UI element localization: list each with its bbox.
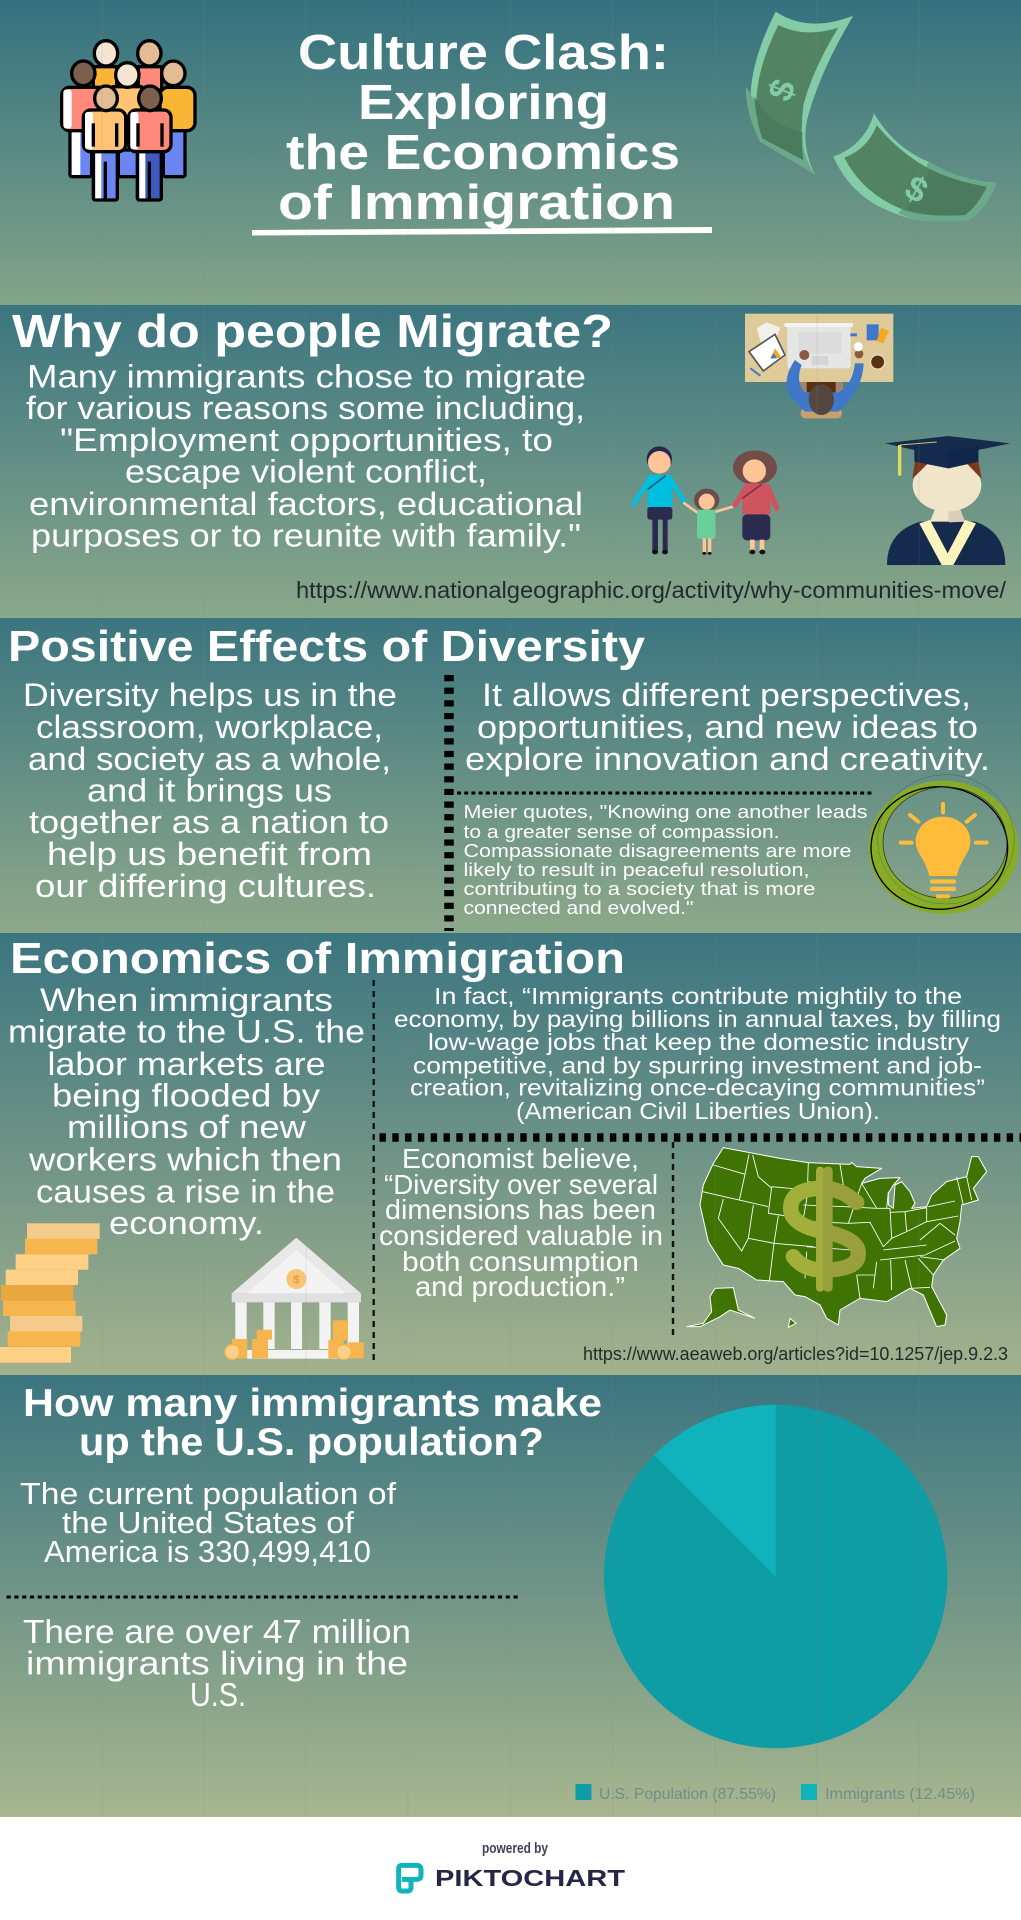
text block: immigrant count xyxy=(23,1614,411,1714)
text block: reasons: escape violent conflict, xyxy=(125,454,487,490)
text block: diversity helps: Diversity helps us in the xyxy=(23,677,397,713)
text block: reasons: Many immigrants chose to migrate xyxy=(27,358,586,394)
chart legend: Immigrants (12.45%) xyxy=(825,1786,975,1803)
heading xyxy=(23,1382,602,1464)
text block: economist quote: “Diversity over several xyxy=(384,1169,658,1200)
text block: economist quote: both consumption xyxy=(402,1246,639,1277)
text block: Meier quote: likely to result in peaceful resolution, xyxy=(464,860,810,880)
footer: powered by Piktochart: PIKTOCHART xyxy=(435,1865,625,1891)
chart legend: U.S. Population (87.55%) xyxy=(599,1786,776,1803)
icon: U.S. map with dollar sign xyxy=(687,1148,987,1327)
text block: current population: the United States of xyxy=(62,1506,355,1540)
text block: labor markets: economy. xyxy=(109,1205,264,1241)
text block: labor markets: causes a rise in the xyxy=(36,1174,335,1210)
title xyxy=(278,26,680,230)
pie chart xyxy=(604,1405,947,1748)
icon: family xyxy=(633,446,777,555)
text block: diversity helps: our differing cultures. xyxy=(35,868,376,904)
text block: diversity helps xyxy=(23,677,397,904)
title: Exploring xyxy=(358,76,609,130)
text block: diversity helps: together as a nation to xyxy=(29,804,389,840)
footer: powered by Piktochart xyxy=(0,1817,1021,1920)
icon: flying dollar bills xyxy=(746,12,997,221)
heading: Economics of Immigration xyxy=(10,934,625,983)
icon: bank with coins xyxy=(225,1238,364,1359)
text block: reasons: environmental factors, educational xyxy=(29,486,583,522)
text block: Meier quote: Meier quotes, "Knowing one another leads xyxy=(464,802,868,822)
text block: economist quote: Economist believe, xyxy=(402,1143,639,1174)
text block: labor markets: being flooded by xyxy=(52,1078,321,1114)
text block: Meier quote: connected and evolved." xyxy=(464,898,694,918)
panel: immigrant population xyxy=(0,1375,1021,1817)
title: Culture Clash: xyxy=(298,26,669,80)
text block: reasons: purposes or to reunite with family." xyxy=(31,518,581,554)
text block: labor markets xyxy=(8,982,365,1241)
text block: immigrant count: There are over 47 million xyxy=(23,1614,411,1651)
text block: economist quote: and production.” xyxy=(415,1271,625,1302)
heading: up the U.S. population? xyxy=(79,1421,544,1464)
icon: group of people xyxy=(62,41,195,200)
text block: labor markets: workers which then xyxy=(28,1142,342,1178)
icon: Piktochart logo xyxy=(399,1865,421,1891)
icon: flying dollar bills: $ xyxy=(761,74,804,106)
text block: ACLU quote: (American Civil Liberties Union). xyxy=(516,1098,880,1124)
text block: labor markets: labor markets are xyxy=(48,1046,326,1082)
title: the Economics xyxy=(286,126,680,180)
text block: diversity helps: help us benefit from xyxy=(47,836,372,872)
footer: powered by Piktochart: powered by xyxy=(482,1840,549,1857)
text block: perspectives: explore innovation and creativity. xyxy=(465,741,990,777)
text block: diversity helps: and society as a whole, xyxy=(28,741,391,777)
heading: Positive Effects of Diversity xyxy=(8,623,645,671)
text block: perspectives: opportunities, and new ideas to xyxy=(477,709,978,745)
panel: economics of immigration xyxy=(0,933,1021,1375)
chart legend xyxy=(576,1784,975,1803)
icon: person at desk xyxy=(745,314,893,418)
text block: immigrant count: immigrants living in the xyxy=(26,1646,408,1682)
text block: labor markets: migrate to the U.S. the xyxy=(8,1014,365,1050)
text block: ACLU quote: creation, revitalizing once-decaying communities” xyxy=(410,1075,985,1101)
text block: diversity helps: and it brings us xyxy=(87,773,332,809)
text block: ACLU quote: low-wage jobs that keep the domestic industry xyxy=(428,1029,970,1055)
text block: current population: The current population of xyxy=(20,1477,397,1511)
text block: Meier quote xyxy=(464,802,868,918)
text block: Meier quote: to a greater sense of compassion. xyxy=(464,822,780,842)
text block: current population xyxy=(20,1477,397,1569)
title underline xyxy=(252,227,712,236)
source link: https://www.nationalgeographic.org/activity/why-communities-move/ xyxy=(296,577,1007,603)
text block: Meier quote: contributing to a society that is more xyxy=(464,879,816,899)
title: of Immigration xyxy=(278,176,675,230)
panel: positive effects of diversity xyxy=(0,618,1021,933)
text block: diversity helps: classroom, workplace, xyxy=(36,709,383,745)
text block: ACLU quote xyxy=(394,983,1001,1124)
text block: reasons: for various reasons some including, xyxy=(26,390,585,426)
text block: perspectives: It allows different perspectives, xyxy=(482,677,971,713)
text block: economist quote: dimensions has been xyxy=(385,1194,656,1225)
text block: ACLU quote: In fact, “Immigrants contribute mightily to the xyxy=(434,983,962,1009)
icon: coin stack xyxy=(0,1223,100,1363)
text block: labor markets: When immigrants xyxy=(40,982,333,1018)
text block: current population: America is 330,499,410 xyxy=(44,1535,371,1569)
text block: immigrant count: U.S. xyxy=(190,1677,246,1714)
text block: economist quote: considered valuable in xyxy=(379,1220,663,1251)
panel: title header xyxy=(0,0,1021,305)
icon: bank with coins: $ xyxy=(293,1274,300,1286)
heading: How many immigrants make xyxy=(23,1382,602,1425)
text block: labor markets: millions of new xyxy=(67,1109,307,1145)
text block: economist quote xyxy=(379,1143,663,1302)
text block: reasons: "Employment opportunities, to xyxy=(60,422,553,458)
text block: ACLU quote: competitive, and by spurring investment and job- xyxy=(413,1052,982,1078)
text block: Meier quote: Compassionate disagreements are more xyxy=(464,841,852,861)
heading: Why do people Migrate? xyxy=(12,305,613,357)
text block: ACLU quote: economy, by paying billions in annual taxes, by filling xyxy=(394,1006,1001,1032)
source link: https://www.aeaweb.org/articles?id=10.1257/jep.9.2.3 xyxy=(583,1344,1008,1364)
icon: flying dollar bills: $ xyxy=(899,169,934,211)
panel: why do people migrate xyxy=(0,305,1021,618)
text block: reasons xyxy=(26,358,586,554)
text block: perspectives xyxy=(465,677,990,777)
icon: light bulb in ring xyxy=(868,775,1018,914)
icon: graduate xyxy=(885,436,1010,565)
